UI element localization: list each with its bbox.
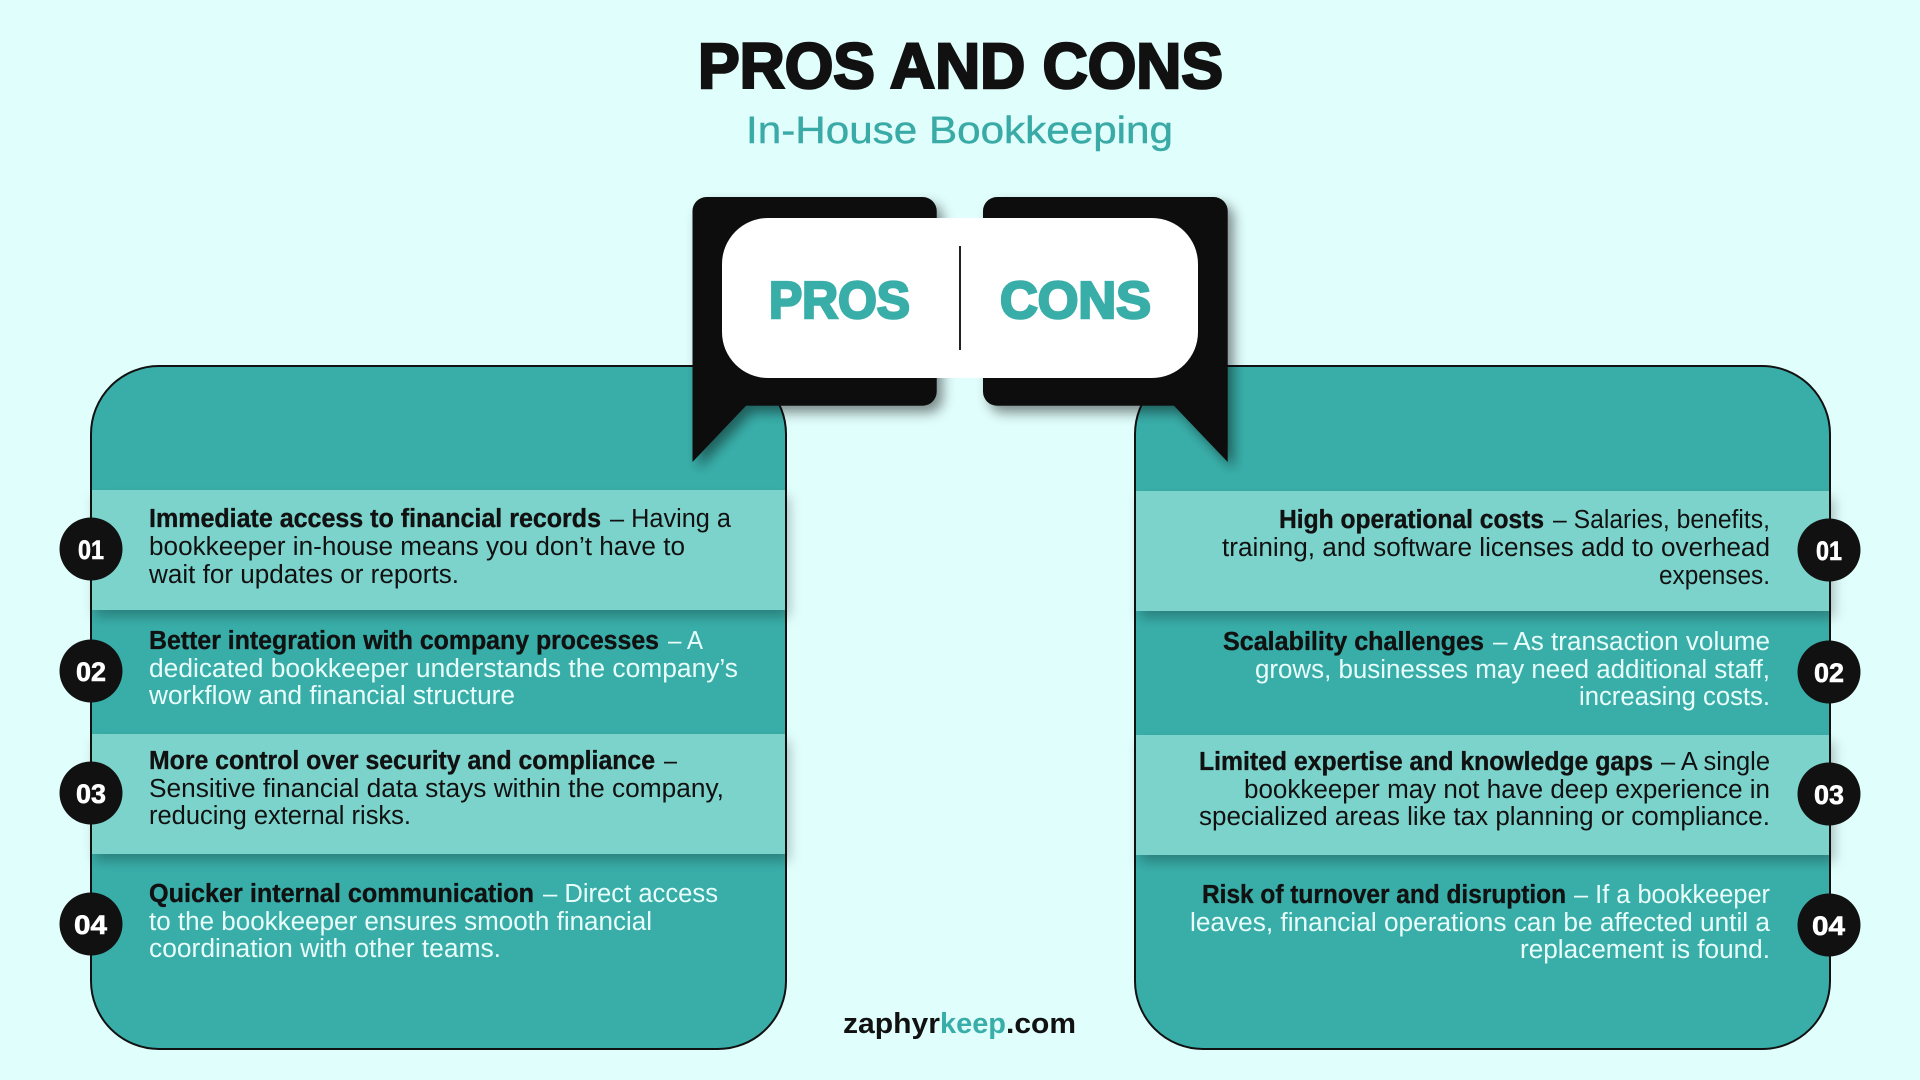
- pro 04 text: Quicker internal communication: [149, 880, 534, 908]
- con 03 text: specialized areas like tax planning or compliance.: [1199, 803, 1770, 831]
- band: pros row 1: [91, 490, 785, 610]
- con 04 text: – If a bookkeeper: [1574, 881, 1770, 909]
- con 03 text: bookkeeper may not have deep experience in: [1244, 776, 1770, 804]
- speech bubble: pros: [692, 197, 937, 462]
- footer website: [843, 1008, 1076, 1040]
- pro 02 text: [148, 627, 738, 710]
- band: cons row 3: [1136, 735, 1830, 855]
- header pill: [722, 218, 1198, 378]
- badge: pro 03: 03: [76, 779, 106, 809]
- badge: pro 01: [60, 518, 122, 580]
- badge: pro 02: 02: [76, 657, 106, 687]
- badge: con 02: 02: [1814, 658, 1844, 688]
- badge: con 01: 01: [1816, 536, 1842, 566]
- title: PROS AND CONS: [698, 30, 1223, 102]
- pro 04 text: to the bookkeeper ensures smooth financial: [149, 908, 652, 936]
- band: cons row 1: [1136, 491, 1830, 611]
- pro 02 text: – A: [668, 627, 703, 655]
- footer website: zaphyr: [843, 1008, 940, 1040]
- con 02 text: – As transaction volume: [1493, 628, 1770, 656]
- con 01 text: – Salaries, benefits,: [1553, 506, 1770, 534]
- pro 01 text: wait for updates or reports.: [148, 561, 459, 589]
- pro 01 text: bookkeeper in-house means you don’t have to: [149, 533, 685, 561]
- pro 03 text: –: [664, 747, 678, 775]
- con 01 text: [1222, 506, 1770, 590]
- badge: con 04: [1798, 894, 1860, 956]
- badge: pro 03: [60, 762, 122, 824]
- con 01 text: High operational costs: [1279, 506, 1544, 534]
- con 04 text: leaves, financial operations can be affected until a: [1190, 909, 1771, 937]
- pro 02 text: dedicated bookkeeper understands the company’s: [149, 655, 738, 683]
- con 02 text: Scalability challenges: [1223, 628, 1484, 656]
- footer website: keep: [940, 1008, 1006, 1040]
- badge: pro 04: 04: [74, 910, 107, 940]
- con 04 text: replacement is found.: [1520, 936, 1770, 964]
- pro 03 text: More control over security and compliance: [149, 747, 655, 775]
- pro 03 text: [149, 747, 724, 830]
- con 02 text: grows, businesses may need additional staff,: [1255, 656, 1770, 684]
- pro 04 text: – Direct access: [543, 880, 718, 908]
- label: pros: PROS: [769, 272, 910, 330]
- pro 04 text: [149, 880, 718, 963]
- badge: con 03: 03: [1814, 780, 1844, 810]
- pro 01 text: Immediate access to financial records: [149, 505, 601, 533]
- badge: pro 04: [60, 892, 122, 956]
- con 03 text: Limited expertise and knowledge gaps: [1199, 748, 1653, 776]
- con 03 text: [1199, 748, 1770, 831]
- divider line: [959, 246, 961, 350]
- panel: cons: [1135, 366, 1860, 1049]
- badge: con 04: 04: [1812, 911, 1845, 941]
- con 04 text: Risk of turnover and disruption: [1202, 881, 1566, 909]
- con 02 text: increasing costs.: [1579, 683, 1770, 711]
- panel: pros: [60, 366, 786, 1049]
- pro 02 text: workflow and financial structure: [148, 682, 515, 710]
- con 01 text: training, and software licenses add to overhead: [1222, 534, 1770, 562]
- footer website: .com: [1006, 1008, 1076, 1040]
- con 01 text: expenses.: [1659, 562, 1770, 590]
- pro 04 text: coordination with other teams.: [149, 935, 501, 963]
- badge: pro 02: [60, 640, 122, 702]
- con 04 text: [1190, 881, 1771, 964]
- badge: con 02: [1798, 640, 1860, 704]
- con 03 text: – A single: [1661, 748, 1770, 776]
- subtitle: In-House Bookkeeping: [746, 110, 1173, 152]
- badge: con 03: [1798, 762, 1860, 826]
- pro 01 text: [148, 505, 732, 589]
- con 02 text: [1223, 628, 1770, 711]
- label: cons: CONS: [1000, 272, 1151, 330]
- pro 02 text: Better integration with company processes: [149, 627, 659, 655]
- pro 01 text: – Having a: [610, 505, 732, 533]
- speech bubble: cons: [983, 197, 1228, 462]
- pro 03 text: Sensitive financial data stays within the company,: [149, 775, 724, 803]
- band: pros row 3: [91, 734, 785, 854]
- badge: con 01: [1798, 518, 1860, 582]
- pro 03 text: reducing external risks.: [149, 802, 411, 830]
- badge: pro 01: 01: [78, 535, 104, 565]
